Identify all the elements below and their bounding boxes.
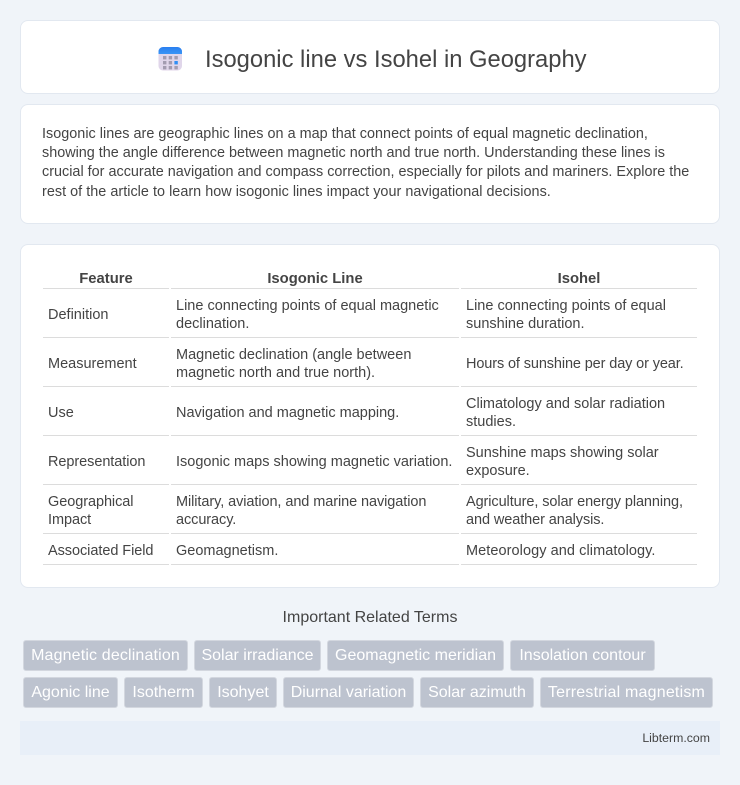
table header: Isogonic Line — [267, 271, 363, 287]
table header: Isohel — [558, 271, 600, 287]
related terms chips: Terrestrial magnetism — [548, 684, 705, 701]
row: measurement: Measurement — [48, 356, 137, 372]
header card — [20, 20, 720, 94]
row: geographical impact: Agriculture, solar energy planning, — [466, 494, 683, 510]
row: use — [48, 396, 665, 430]
row: definition: declination. — [176, 316, 249, 332]
row: associated field: Geomagnetism. — [176, 543, 278, 559]
icon: calendar — [158, 47, 182, 70]
intro paragraph: crucial for accurate navigation and compass correction, especially for pilots and mariners. Explore the — [42, 164, 689, 180]
row: geographical impact: and weather analysis. — [466, 512, 604, 528]
related terms chips — [23, 640, 713, 708]
related terms chips: Isotherm — [132, 684, 195, 701]
row: representation — [48, 445, 659, 479]
row: use: Navigation and magnetic mapping. — [176, 405, 399, 421]
table header — [79, 271, 600, 287]
related terms chips: Geomagnetic meridian — [335, 647, 496, 664]
row: measurement: Magnetic declination (angle between — [176, 347, 411, 363]
row: use: Use — [48, 405, 74, 421]
row: definition — [48, 298, 666, 332]
related terms heading: Important Related Terms — [283, 609, 457, 626]
footer credit: Libterm.com — [642, 731, 710, 745]
related terms chips: Isohyet — [217, 684, 269, 701]
row: measurement: magnetic north and true north). — [176, 365, 375, 381]
footer bar — [20, 721, 720, 755]
row: representation: Sunshine maps showing solar — [466, 445, 659, 461]
row: representation: Isogonic maps showing magnetic variation. — [176, 454, 452, 470]
row: definition: Line connecting points of equal — [466, 298, 666, 314]
intro card — [20, 104, 720, 224]
row: geographical impact — [48, 494, 683, 528]
intro paragraph — [42, 126, 689, 200]
related terms chips: Insolation contour — [519, 647, 646, 664]
row: associated field — [48, 543, 655, 559]
row: definition: sunshine duration. — [466, 316, 584, 332]
row: representation: Representation — [48, 454, 145, 470]
row: definition: Line connecting points of equal magnetic — [176, 298, 439, 314]
row: associated field: Associated Field — [48, 543, 153, 559]
row: use: studies. — [466, 414, 516, 430]
row: measurement: Hours of sunshine per day or year. — [466, 356, 684, 372]
intro paragraph: rest of the article to learn how isogonic lines impact your navigational decisions. — [42, 184, 551, 200]
related terms chips: Magnetic declination — [31, 647, 180, 664]
related terms chips: Agonic line — [31, 684, 110, 701]
row: use: Climatology and solar radiation — [466, 396, 665, 412]
title: Isogonic line vs Isohel in Geography — [205, 46, 587, 73]
row: geographical impact: Geographical — [48, 494, 133, 510]
intro paragraph: Isogonic lines are geographic lines on a map that connect points of equal magnetic declination, — [42, 126, 648, 142]
row: geographical impact: Impact — [48, 512, 91, 528]
row: geographical impact: Military, aviation, and marine navigation — [176, 494, 426, 510]
intro paragraph: showing the angle difference between magnetic north and true north. Understanding these lines is — [42, 145, 665, 161]
related terms chips: Diurnal variation — [291, 684, 406, 701]
row: associated field: Meteorology and climatology. — [466, 543, 655, 559]
comparison table card — [20, 244, 720, 588]
related terms chips: Solar irradiance — [201, 647, 314, 664]
related terms chips: Solar azimuth — [428, 684, 526, 701]
table header: Feature — [79, 271, 133, 287]
row: geographical impact: accuracy. — [176, 512, 236, 528]
row: definition: Definition — [48, 307, 108, 323]
row: representation: exposure. — [466, 463, 530, 479]
row: measurement — [48, 347, 684, 381]
